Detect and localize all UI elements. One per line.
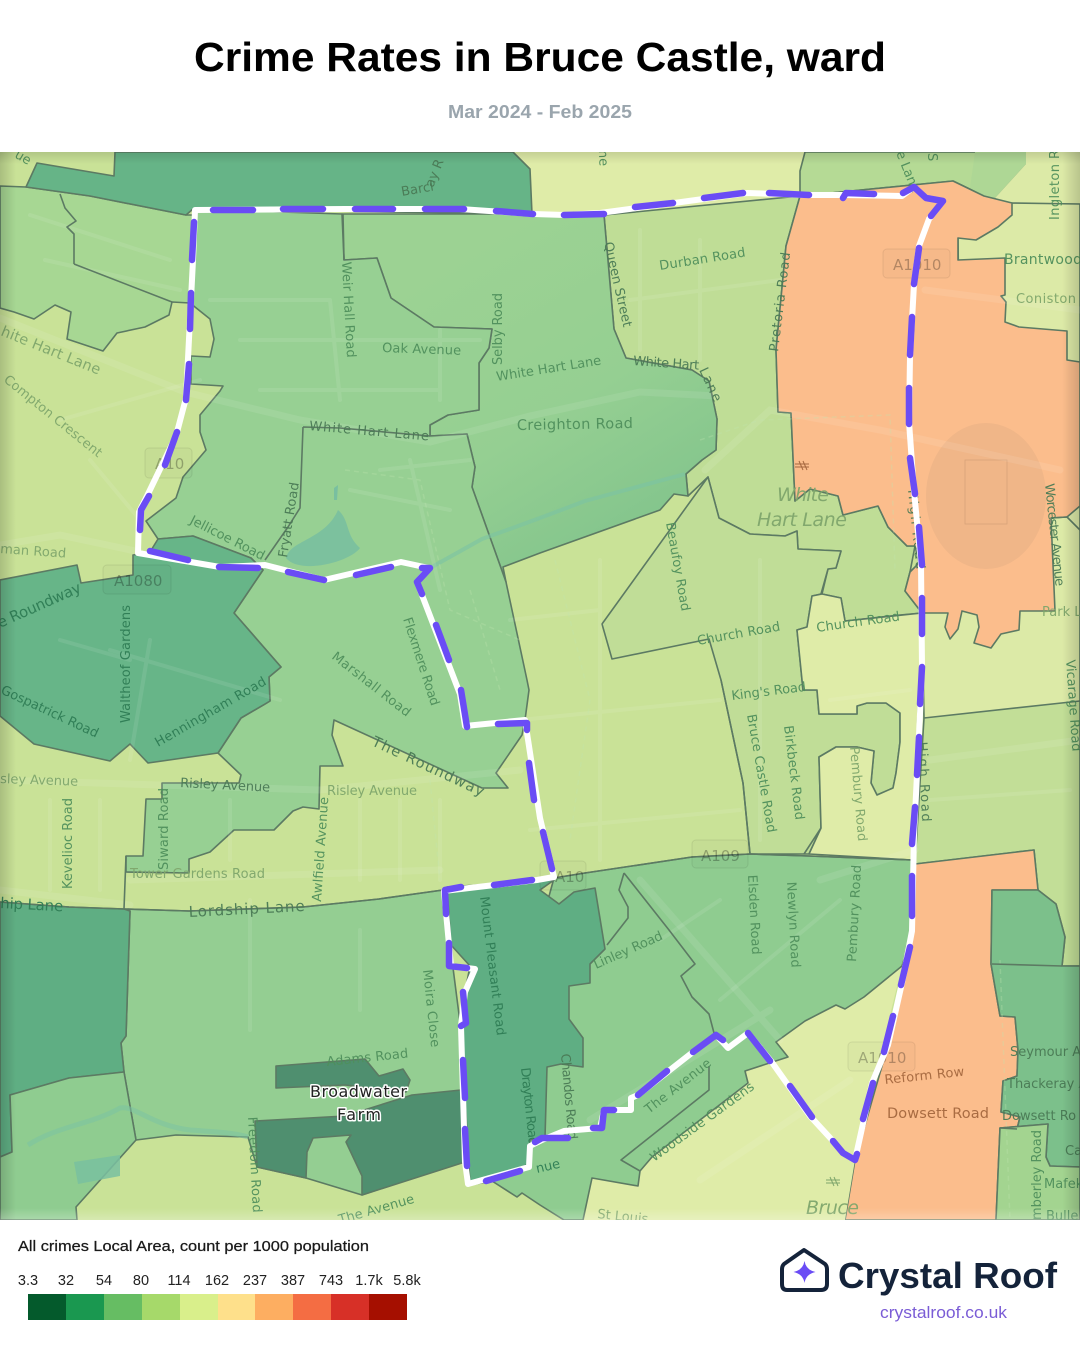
road labels: Bruce	[806, 1197, 859, 1219]
road labels: Awlfield Avenue	[310, 796, 332, 902]
road labels: Kevelioc Road	[61, 798, 76, 889]
road labels: Waltheof Gardens	[119, 605, 134, 723]
legend scale values: 54	[96, 1273, 112, 1289]
road labels: Chandos Road	[557, 1053, 579, 1140]
road network	[0, 215, 1080, 1180]
road labels: Henningham Road	[152, 674, 269, 750]
road labels: ay R	[423, 157, 448, 189]
place label: Broadwater Farm	[310, 1082, 407, 1124]
place label: Broadwater Farm: Farm	[337, 1105, 381, 1124]
road labels: Adams Road	[326, 1046, 409, 1070]
road labels: King's Road	[731, 680, 807, 704]
region areas	[0, 152, 1080, 1220]
road labels: Tower Gardens Road	[129, 867, 265, 882]
road shields: A10	[155, 455, 184, 473]
road labels: hip Lane	[0, 894, 64, 915]
place label: Broadwater Farm: Broadwater	[310, 1082, 407, 1101]
road labels: Freedom Road	[244, 1116, 264, 1213]
road labels: Reform Row	[884, 1065, 965, 1088]
road labels: Weir Hall Road	[338, 261, 358, 358]
road labels: White Hart Lane	[309, 419, 430, 444]
road labels: Moira Close	[419, 969, 442, 1048]
road labels: Newlyn Road	[783, 881, 802, 968]
stadium	[926, 423, 1046, 569]
logo: Crystal Roof	[782, 1250, 1058, 1322]
road labels: White Hart Lane	[495, 354, 602, 385]
road labels: Lane	[695, 365, 724, 404]
road labels: Church Road	[696, 620, 781, 649]
road labels: Risley Avenue	[327, 784, 417, 799]
legend scale values: 80	[133, 1273, 149, 1289]
legend scale values: 743	[319, 1273, 343, 1289]
road labels: Selby Road	[491, 293, 506, 365]
ward boundary: purple dashes	[140, 187, 943, 1181]
road labels: Birkbeck Road	[780, 725, 806, 821]
road labels: St Louis	[597, 1207, 649, 1227]
road labels: Barcl	[400, 179, 435, 200]
icon: house with star	[782, 1250, 827, 1290]
road labels: Coniston	[1016, 292, 1076, 307]
road labels: Gospatrick Road	[0, 683, 101, 741]
legend scale values: 237	[243, 1273, 267, 1289]
legend	[18, 1239, 421, 1320]
legend title: All crimes Local Area, count per 1000 population	[18, 1239, 369, 1255]
road labels: Pembury Road	[845, 865, 865, 962]
ward boundary: white line	[138, 187, 943, 1184]
road labels: Linley Road	[592, 929, 665, 973]
footpaths	[345, 415, 1010, 1220]
road labels: Pembury Road	[846, 746, 869, 842]
logo wordmark: Crystal Roof	[838, 1255, 1058, 1296]
road labels: Jellicoe Road	[186, 513, 267, 564]
road labels: Fryatt Road	[276, 481, 303, 559]
road shields: A10	[555, 868, 584, 886]
road shields: A1010	[858, 1049, 906, 1067]
road labels: Durban Road	[658, 246, 747, 274]
road labels: Beaufoy Road	[662, 521, 692, 612]
road labels: S	[924, 153, 939, 161]
road labels: Brantwood	[1004, 252, 1080, 268]
road labels: High Road	[904, 489, 927, 570]
road labels: Drayton Road	[517, 1067, 540, 1146]
subtitle: date range: Mar 2024 - Feb 2025	[448, 102, 632, 122]
road labels: Flexmere Road	[399, 616, 442, 708]
road labels: e Lane	[892, 149, 923, 195]
road labels: White	[777, 484, 829, 506]
road labels: Bulle	[1046, 1209, 1078, 1224]
road labels: Oak Avenue	[382, 341, 461, 359]
legend colour bar	[28, 1294, 407, 1320]
road labels: The Roundway	[368, 734, 487, 800]
road labels: ne	[595, 150, 610, 166]
road labels: Bruce Castle Road	[743, 713, 779, 834]
legend scale values: 32	[58, 1273, 74, 1289]
road labels: Ingleton R	[1048, 150, 1063, 220]
road labels: High Road	[914, 741, 933, 822]
title: Crime Rates in Bruce Castle, ward	[194, 34, 886, 80]
road labels: Siward Road	[157, 788, 172, 870]
road labels: Elsden Road	[744, 874, 763, 955]
water features	[28, 474, 685, 1184]
road labels: Queen Street	[600, 241, 634, 329]
road labels: Woodside Gardens	[648, 1079, 758, 1165]
legend scale values: 3.3	[18, 1273, 38, 1289]
road labels: ue	[12, 147, 34, 169]
road shields: A109	[701, 847, 740, 865]
boundary lines	[0, 194, 1080, 1171]
road labels: man Road	[0, 542, 67, 562]
legend scale values: 5.8k	[393, 1273, 421, 1289]
road shields: A1010	[893, 256, 941, 274]
road labels: Dowsett Road	[887, 1106, 989, 1122]
road labels: Seymour A	[1010, 1045, 1080, 1060]
road labels: Mount Pleasant Road	[476, 896, 508, 1036]
road labels: Creighton Road	[517, 416, 633, 434]
road labels: Worcester Avenue	[1041, 483, 1067, 587]
legend scale values: 387	[281, 1273, 305, 1289]
road labels: Hart Lane	[757, 509, 847, 531]
legend scale values: 1.7k	[355, 1273, 383, 1289]
icon: rail stations	[795, 461, 840, 1186]
road labels: White Hart	[633, 354, 700, 374]
road labels: Church Road	[815, 609, 901, 636]
road labels: Dowsett Ro	[1002, 1109, 1076, 1124]
road labels: Pretoria Road	[767, 251, 794, 352]
map edge shading	[0, 152, 1080, 1220]
road labels: hite Hart Lane	[0, 324, 103, 378]
road shields: A1080	[114, 572, 162, 590]
legend scale values: 162	[205, 1273, 229, 1289]
road labels: Lordship Lane	[188, 897, 305, 921]
legend scale values: 114	[167, 1273, 191, 1289]
road labels: sley Avenue	[0, 772, 78, 790]
website url: crystalroof.co.uk	[880, 1304, 1008, 1322]
road labels: mberley Road	[1030, 1130, 1045, 1220]
road labels: Compton Crescent	[0, 372, 105, 461]
road labels: nue	[535, 1157, 562, 1177]
road labels: Marshall Road	[329, 649, 413, 720]
road labels: The Avenue	[336, 1192, 416, 1228]
road labels: Risley Avenue	[180, 776, 270, 796]
road shields	[103, 249, 950, 1071]
road labels: The Avenue	[641, 1056, 715, 1118]
legend scale values	[18, 1273, 421, 1289]
